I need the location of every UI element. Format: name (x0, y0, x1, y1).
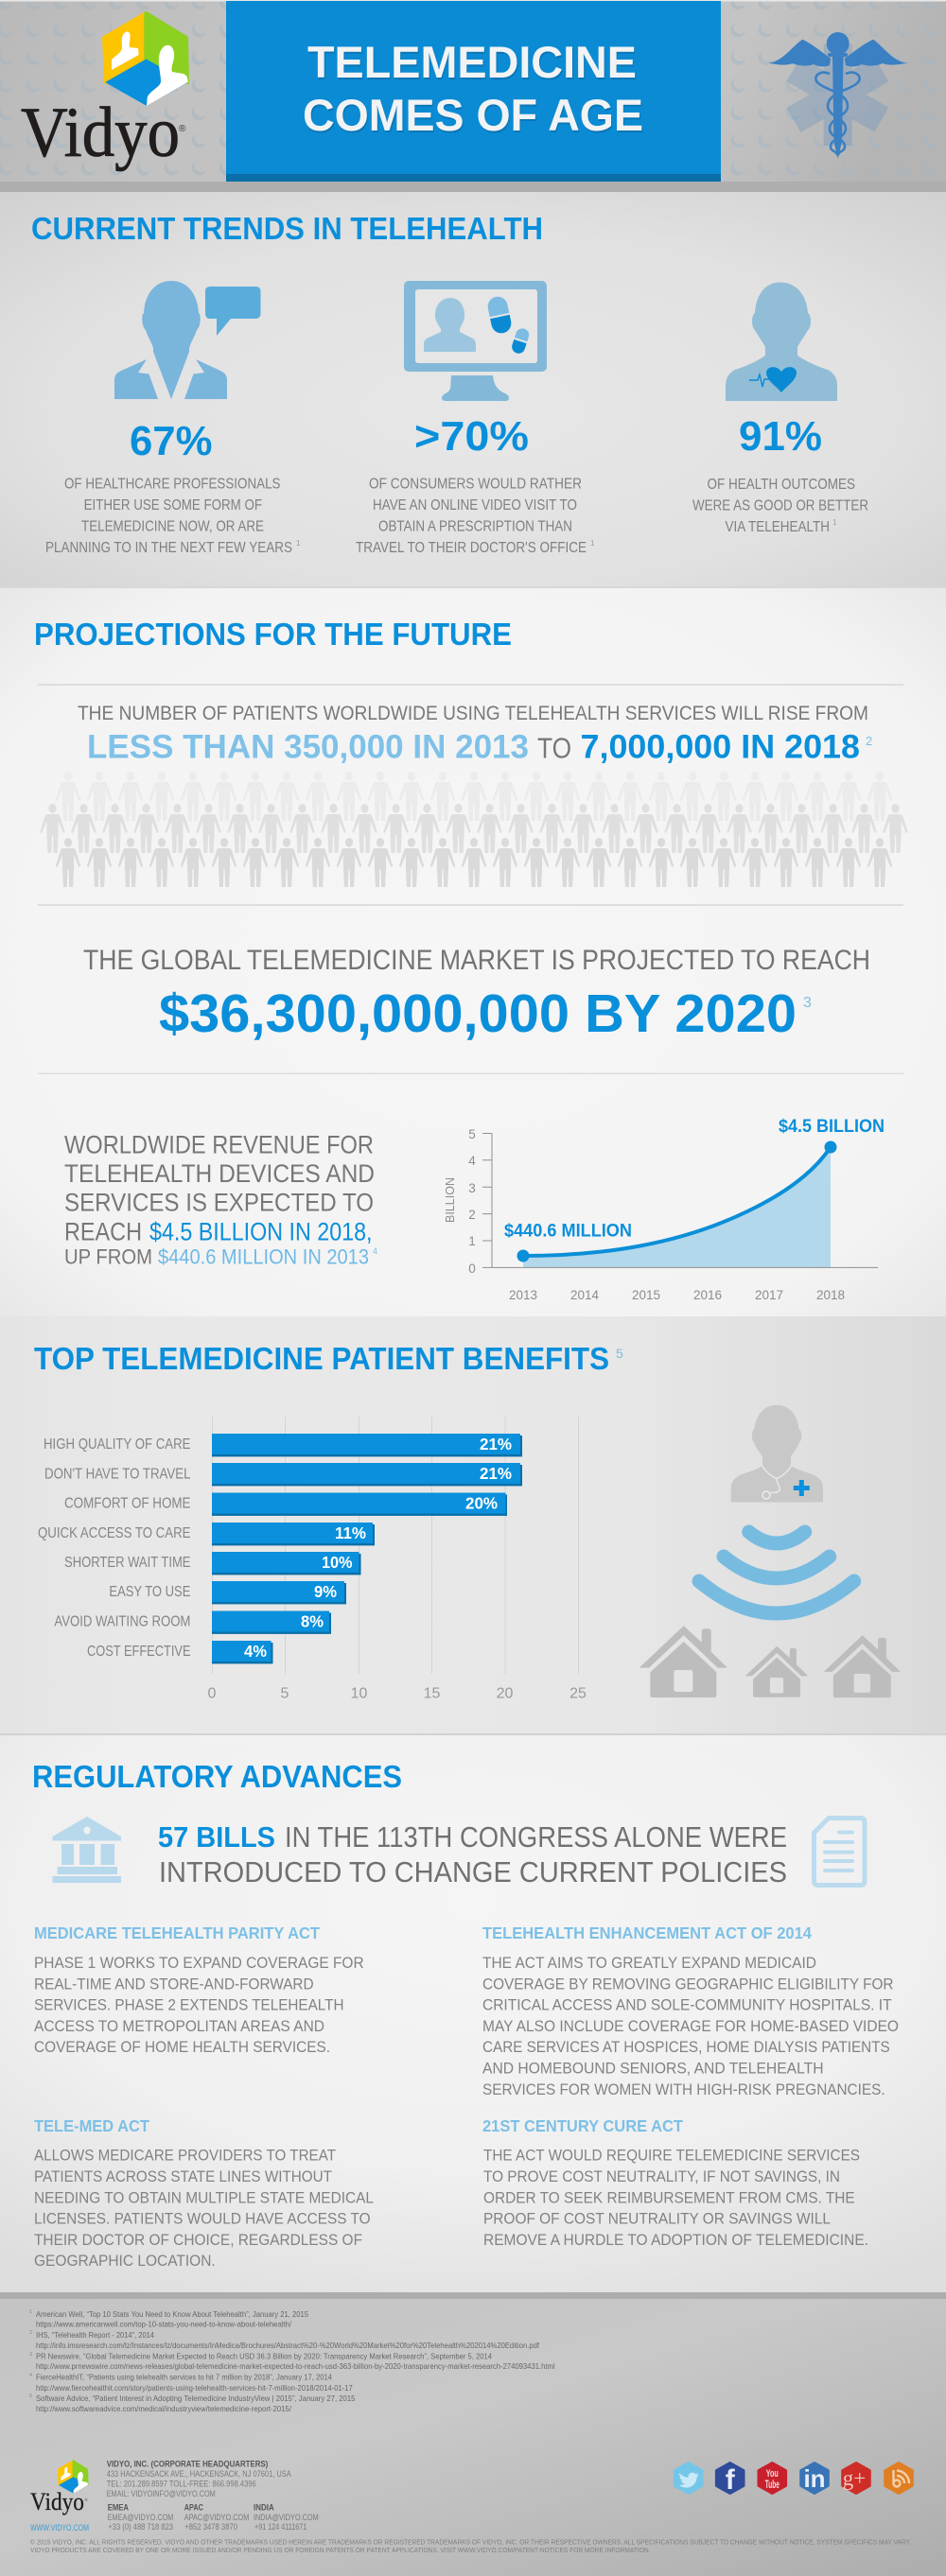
act: Tele-Med Act: PATIENTS ACROSS STATE LINES WITHOUT (34, 2167, 332, 2185)
market statement: THE GLOBAL TELEMEDICINE MARKET IS PROJECTED TO REACH (83, 945, 870, 976)
patients statement: LESS THAN 350,000 IN 2013 (87, 728, 529, 766)
line chart: revenue (444, 1117, 885, 1302)
act: 21st Century Cure Act: TO PROVE COST NEUTRALITY, IF NOT SAVINGS, IN (483, 2167, 840, 2185)
bar: comfort of home: 20% (465, 1494, 498, 1513)
act: Telehealth Enhancement Act of 2014: TELEHEALTH ENHANCEMENT ACT OF 2014 (482, 1923, 812, 1942)
contact details: VIDYO, INC. (CORPORATE HEADQUARTERS) (107, 2459, 268, 2469)
stat: 91 percent: 91% (739, 413, 822, 460)
stat: 91 percent: OF HEALTH OUTCOMES (708, 477, 855, 493)
social icons (674, 2463, 912, 2496)
bills statement: IN THE 113TH CONGRESS ALONE WERE (285, 1820, 787, 1854)
bar: shorter wait time: SHORTER WAIT TIME (64, 1555, 191, 1571)
icon: linkedin: in (803, 2464, 826, 2493)
stat: over 70 percent: >70% (414, 413, 529, 460)
icon: twitter (674, 2463, 702, 2493)
act: Telehealth Enhancement Act of 2014 (482, 1923, 899, 2098)
icon: monitor with patient and pills (404, 281, 547, 401)
footnotes: 4 (29, 2373, 32, 2378)
line chart: revenue: 2017 (755, 1288, 783, 1302)
line chart: revenue: $4.5 BILLION (779, 1117, 885, 1137)
stat: 67 percent: EITHER USE SOME FORM OF (84, 497, 262, 513)
legal text (30, 2538, 911, 2554)
bar: don't have to travel: DON'T HAVE TO TRAVEL (44, 1466, 191, 1483)
act: 21st Century Cure Act: 21ST CENTURY CURE ACT (482, 2116, 683, 2135)
act: 21st Century Cure Act (482, 2116, 868, 2249)
revenue statement (64, 1131, 377, 1268)
bar chart: 5 (281, 1685, 289, 1702)
act: Medicare Telehealth Parity Act: ACCESS TO METROPOLITAN AREAS AND (34, 2017, 324, 2035)
footnotes: http://www.prnewswire.com/news-releases/global-telemedicine-market-expected-to-reach-usd-363-billion-by-2020-transparency-market-research-274093431.html (36, 2361, 555, 2371)
bar: high quality of care: HIGH QUALITY OF CARE (44, 1436, 191, 1453)
panel: top telemedicine patient benefits: 5 (616, 1346, 623, 1361)
stat: 67 percent: 1 (296, 539, 301, 548)
logo: Vidyo small: WWW.VIDYO.COM (30, 2523, 89, 2533)
bar: don't have to travel (44, 1463, 522, 1486)
patients statement: 7,000,000 IN 2018 (581, 728, 860, 766)
act: Telehealth Enhancement Act of 2014: CARE SERVICES AT HOSPICES, HOME DIALYSIS PATIENTS (482, 2038, 890, 2056)
act: Telehealth Enhancement Act of 2014: CRITICAL ACCESS AND SOLE-COMMUNITY HOSPITALS. IT (482, 1996, 892, 2014)
line chart: revenue: 2016 (693, 1288, 722, 1302)
contact details: EMEA (108, 2502, 129, 2513)
act: Medicare Telehealth Parity Act: COVERAGE OF HOME HEALTH SERVICES. (34, 2038, 330, 2056)
bar: easy to use: 9% (314, 1582, 337, 1601)
patients statement: 2 (866, 734, 872, 748)
patients statement: THE NUMBER OF PATIENTS WORLDWIDE USING TELEHEALTH SERVICES WILL RISE FROM (78, 702, 868, 724)
footnotes: Software Advice, “Patient Interest in Adopting Telemedicine IndustryView | 2015”, January 27, 2015 (36, 2393, 356, 2403)
revenue statement: WORLDWIDE REVENUE FOR (64, 1131, 374, 1159)
icon: youtube (759, 2463, 786, 2493)
bar: avoid waiting room: 8% (301, 1611, 324, 1630)
revenue statement: REACH (64, 1218, 142, 1246)
heading: REGULATORY ADVANCES (32, 1759, 402, 1794)
stat: 91 percent: VIA TELEHEALTH (725, 519, 830, 535)
stat: 91 percent: WERE AS GOOD OR BETTER (692, 497, 868, 514)
market statement (83, 945, 870, 1044)
act: Medicare Telehealth Parity Act: SERVICES. PHASE 2 EXTENDS TELEHEALTH (34, 1996, 344, 2014)
stat: over 70 percent: OBTAIN A PRESCRIPTION THAN (378, 518, 572, 535)
act: Tele-Med Act: GEOGRAPHIC LOCATION. (34, 2252, 216, 2270)
bar: cost effective: COST EFFECTIVE (87, 1644, 191, 1660)
stat: 67 percent: TELEMEDICINE NOW, OR ARE (81, 518, 264, 535)
bar: quick access to care (38, 1523, 375, 1545)
logo: Vidyo small: Vidyo (30, 2488, 84, 2515)
bar: avoid waiting room: AVOID WAITING ROOM (54, 1613, 190, 1630)
revenue statement: $440.6 MILLION IN 2013 (158, 1244, 369, 1268)
contact details: APAC@VIDYO.COM (184, 2513, 249, 2523)
footnotes (29, 2309, 555, 2413)
bar: comfort of home: COMFORT OF HOME (64, 1496, 191, 1511)
heading: PROJECTIONS FOR THE FUTURE (34, 617, 512, 652)
icon: facebook (716, 2463, 744, 2496)
icon: google plus (843, 2463, 869, 2493)
stat: over 70 percent: HAVE AN ONLINE VIDEO VISIT TO (373, 497, 577, 513)
act: 21st Century Cure Act: PROOF OF COST NEUTRALITY OR SAVINGS WILL (483, 2210, 831, 2228)
bills statement (158, 1820, 787, 1888)
line chart: revenue: 5 (468, 1127, 476, 1141)
icon: patient with heart monitor (726, 282, 837, 401)
panel: current trends in telehealth (0, 192, 946, 586)
icon: caduceus over star of life (768, 32, 907, 159)
footnotes: https://www.americanwell.com/top-10-stats-you-need-to-know-about-telehealth/ (36, 2320, 292, 2329)
contact details: +33 (0) 488 718 823 (108, 2522, 173, 2532)
bills statement: 57 BILLS (158, 1820, 275, 1854)
act: Medicare Telehealth Parity Act: MEDICARE TELEHEALTH PARITY ACT (34, 1923, 320, 1942)
title banner (226, 1, 721, 182)
bar: quick access to care: 11% (335, 1523, 366, 1542)
footnotes: IHS, “Telehealth Report - 2014”, 2014 (36, 2330, 154, 2340)
act: Medicare Telehealth Parity Act (34, 1923, 364, 2056)
stat: over 70 percent: 1 (590, 539, 595, 548)
contact details: TEL: 201.289.8597 TOLL-FREE: 866.998.4396 (107, 2480, 256, 2490)
act: 21st Century Cure Act: THE ACT WOULD REQUIRE TELEMEDICINE SERVICES (483, 2147, 860, 2165)
contact details: INDIA (254, 2502, 274, 2513)
revenue statement: TELEHEALTH DEVICES AND (64, 1159, 375, 1188)
market statement: $36,300,000,000 BY 2020 (159, 983, 797, 1044)
bar: high quality of care: 21% (480, 1435, 512, 1453)
contact details (107, 2459, 319, 2532)
revenue statement: SERVICES IS EXPECTED TO (64, 1189, 374, 1217)
act: Telehealth Enhancement Act of 2014: SERVICES FOR WOMEN WITH HIGH-RISK PREGNANCIES. (482, 2080, 885, 2098)
footnotes: 3 (29, 2352, 32, 2358)
logo: Vidyo (21, 13, 188, 172)
icon: facebook: f (726, 2464, 736, 2496)
line chart: revenue: 1 (468, 1234, 476, 1248)
logo: Vidyo: ® (179, 124, 186, 134)
bar chart: 15 (424, 1685, 441, 1702)
stat: over 70 percent (356, 413, 595, 556)
line chart: revenue: 2013 (509, 1288, 537, 1302)
line chart: revenue: 3 (468, 1181, 476, 1195)
act: Tele-Med Act: THEIR DOCTOR OF CHOICE, REGARDLESS OF (34, 2231, 362, 2249)
patients statement: TO (537, 732, 571, 764)
bar: easy to use: EASY TO USE (109, 1584, 190, 1600)
line chart: revenue: 2015 (632, 1288, 660, 1302)
act: Telehealth Enhancement Act of 2014: THE ACT AIMS TO GREATLY EXPAND MEDICAID (482, 1954, 816, 1972)
stat: 67 percent (45, 418, 301, 556)
contact details: EMEA@VIDYO.COM (108, 2513, 173, 2523)
stat: 67 percent: OF HEALTHCARE PROFESSIONALS (64, 477, 280, 492)
bar: cost effective (87, 1641, 272, 1663)
act: Tele-Med Act (34, 2116, 374, 2270)
bar chart (38, 1417, 587, 1702)
icon: youtube: You (766, 2468, 779, 2480)
act: 21st Century Cure Act: REMOVE A HURDLE TO ADOPTION OF TELEMEDICINE. (483, 2231, 868, 2249)
stat: 91 percent: 1 (832, 518, 837, 527)
bar: don't have to travel: 21% (480, 1464, 512, 1483)
footnotes: 1 (29, 2309, 32, 2315)
logo: Vidyo small: ® (85, 2498, 87, 2502)
bar: shorter wait time: 10% (322, 1553, 353, 1572)
bar chart: 25 (569, 1685, 587, 1702)
icon: government building (53, 1817, 121, 1883)
people crowd (40, 772, 908, 887)
footnotes: http://www.fiercehealthit.com/story/patients-using-telehealth-services-hit-7-million-2018/2014-01-17 (36, 2383, 353, 2393)
bar: quick access to care: QUICK ACCESS TO CARE (38, 1525, 191, 1541)
act: Telehealth Enhancement Act of 2014: COVERAGE BY REMOVING GEOGRAPHIC ELIGIBILITY FOR (482, 1975, 893, 1993)
logo: Vidyo: Vidyo (21, 94, 180, 172)
line chart: revenue: 2014 (570, 1288, 600, 1302)
act: Medicare Telehealth Parity Act: PHASE 1 WORKS TO EXPAND COVERAGE FOR (34, 1954, 364, 1972)
revenue statement: 4 (373, 1246, 377, 1256)
footnotes: 5 (29, 2393, 32, 2399)
footnotes: PR Newswire, “Global Telemedicine Market Expected to Reach USD 36.3 Billion by 2020: Transparency Market Research”, September 5, 2014 (36, 2352, 492, 2361)
contact details: +852 3478 3870 (184, 2522, 237, 2532)
act: Medicare Telehealth Parity Act: REAL-TIME AND STORE-AND-FORWARD (34, 1975, 314, 1993)
bar chart: 10 (351, 1685, 367, 1702)
act: Tele-Med Act: TELE-MED ACT (34, 2116, 149, 2135)
icon: rss blog (885, 2463, 912, 2493)
footnotes: American Well, “Top 10 Stats You Need to Know About Telehealth”, January 21, 2015 (36, 2309, 308, 2319)
footnotes: http://info.imsresearch.com/lz/Instances/lz/documents/InMedica/Brochures/Abstract%20-%20World%20Market%20for%20Telehealth%202014%20Edition.pdf (36, 2341, 540, 2350)
stat: 67 percent: PLANNING TO IN THE NEXT FEW YEARS (45, 540, 292, 556)
bar: easy to use (109, 1581, 346, 1604)
icons: homes (639, 1626, 901, 1697)
footnotes: 2 (29, 2330, 32, 2336)
revenue statement: $4.5 BILLION IN 2018, (149, 1218, 373, 1246)
bar: high quality of care (44, 1434, 522, 1456)
revenue statement: UP FROM (64, 1244, 152, 1268)
act: Tele-Med Act: ALLOWS MEDICARE PROVIDERS TO TREAT (34, 2147, 336, 2165)
header panel (0, 0, 946, 192)
bills statement: INTRODUCED TO CHANGE CURRENT POLICIES (159, 1855, 787, 1888)
heading: TOP TELEMEDICINE PATIENT BENEFITS (34, 1341, 609, 1376)
stat: 67 percent: 67% (130, 418, 212, 464)
icon: document (814, 1818, 865, 1886)
act: Tele-Med Act: LICENSES. PATIENTS WOULD HAVE ACCESS TO (34, 2210, 371, 2228)
act: 21st Century Cure Act: ORDER TO SEEK REIMBURSEMENT FROM CMS. THE (483, 2188, 855, 2206)
icon: google plus: g+ (843, 2466, 866, 2490)
stat: 91 percent (692, 413, 868, 535)
bar: comfort of home (64, 1492, 507, 1516)
line chart: revenue: 4 (468, 1154, 476, 1168)
title banner: TELEMEDICINE (307, 37, 637, 87)
stat: over 70 percent: TRAVEL TO THEIR DOCTOR'S OFFICE (356, 540, 587, 556)
logo: Vidyo small (30, 2461, 89, 2533)
contact details: INDIA@VIDYO.COM (254, 2513, 319, 2523)
contact details: APAC (184, 2502, 203, 2513)
icon: wireless signal arcs (699, 1532, 854, 1613)
footnotes: FierceHealthIT, “Patients using telehealth services to hit 7 million by 2018”, January 17, 2014 (36, 2373, 332, 2382)
contact details: 433 HACKENSACK AVE., HACKENSACK, NJ 07601, USA (107, 2469, 291, 2480)
bar: avoid waiting room (54, 1611, 331, 1634)
bar: shorter wait time (64, 1552, 361, 1575)
icon: doctor (731, 1405, 823, 1502)
act: Telehealth Enhancement Act of 2014: MAY ALSO INCLUDE COVERAGE FOR HOME-BASED VIDEO (482, 2017, 899, 2035)
heading: CURRENT TRENDS IN TELEHEALTH (31, 211, 543, 246)
line chart: revenue: $440.6 MILLION (504, 1222, 632, 1241)
line chart: revenue: 0 (468, 1262, 476, 1276)
panel: regulatory advances (0, 1735, 946, 2292)
icon: youtube: Tube (765, 2478, 780, 2491)
contact details: EMAIL: VIDYOINFO@VIDYO.COM (107, 2489, 216, 2499)
act: Tele-Med Act: NEEDING TO OBTAIN MULTIPLE STATE MEDICAL (34, 2188, 374, 2206)
act: Telehealth Enhancement Act of 2014: AND HOMEBOUND SENIORS, AND TELEHEALTH (482, 2060, 823, 2077)
line chart: revenue: 2 (468, 1208, 476, 1222)
bar: cost effective: 4% (244, 1642, 267, 1661)
line chart: revenue: 2018 (816, 1288, 845, 1302)
footnotes: http://www.softwareadvice.com/medical/industryview/telemedicine-report-2015/ (36, 2404, 292, 2413)
panel: top telemedicine patient benefits (0, 1316, 946, 1735)
illustration: doctor connected to homes (639, 1405, 901, 1697)
patients statement (78, 702, 872, 766)
contact details: +91 124 4111671 (254, 2522, 307, 2532)
stat: over 70 percent: OF CONSUMERS WOULD RATHER (369, 477, 582, 492)
panel: projections for the future (0, 586, 946, 1316)
legal text: VIDYO PRODUCTS ARE COVERED BY ONE OR MORE ISSUED AND/OR PENDING US OR FOREIGN PATENTS OR PATENT APPLICATIONS. VISIT WWW.VIDYO.COM/PATENT-NOTICES FOR MORE INFORMATION. (30, 2546, 651, 2554)
bar chart: 0 (208, 1685, 217, 1702)
title banner: COMES OF AGE (303, 90, 643, 140)
bar chart: 20 (497, 1685, 513, 1702)
line chart: revenue: BILLION (444, 1177, 457, 1223)
market statement: 3 (803, 995, 812, 1011)
icon: doctor with speech bubble (114, 281, 261, 399)
panel: footer (0, 2292, 946, 2576)
